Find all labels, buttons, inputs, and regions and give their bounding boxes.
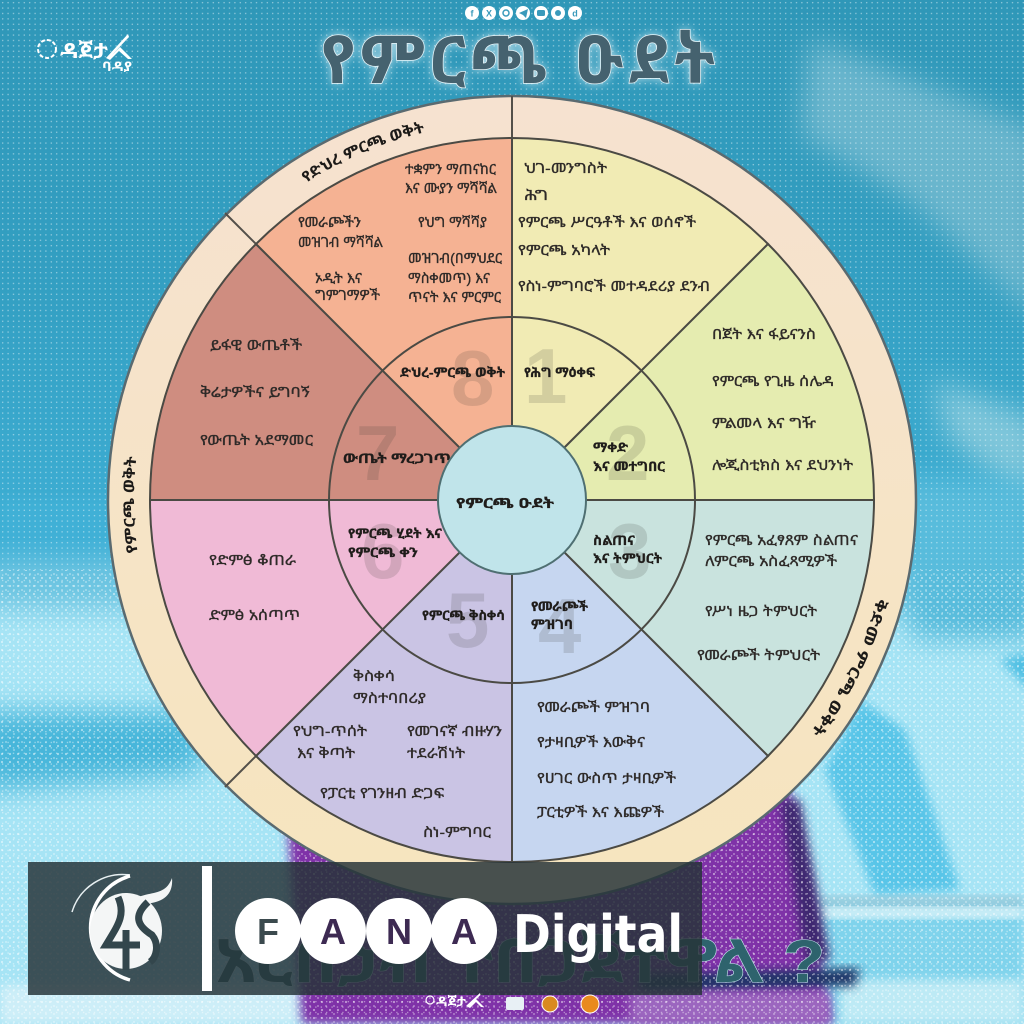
title: የምርጫ ዑደት	[321, 23, 715, 97]
segment 2 text: planning and implementation: የምርጫ የጊዜ ሰሌዳ	[712, 373, 834, 389]
segment 2 text: planning and implementation: በጀት እና ፋይናንስ	[712, 326, 816, 342]
segment 1 text: legal framework: ህገ-መንግስት	[524, 160, 608, 176]
segment 5 text: election campaign: ማስተባበሪያ	[353, 690, 426, 706]
segment 8 text: post-election period: የህግ ማሻሻያ	[418, 214, 487, 230]
segment 5 text: election campaign: የህግ-ጥሰት	[293, 723, 368, 739]
segment 4 text: voter registration: ፓርቲዎች እና እጩዎች	[537, 804, 665, 820]
segment 3 text: training and education: እና ትምህርት	[593, 551, 662, 566]
segment 1 text: legal framework: የምርጫ አካላት	[518, 242, 611, 258]
segment 3 text: training and education: ለምርጫ አስፈጻሚዎች	[705, 553, 838, 569]
title: የምርጫ ዑደት	[321, 23, 715, 97]
segment 8 text: post-election period: መዝገብ ማሻሻል	[298, 234, 384, 250]
ring dividers	[225, 96, 512, 787]
segment 8 text: post-election period: ኦዲት እና	[315, 270, 362, 286]
segment 3 text: training and education: የመራጮች ትምህርት	[697, 647, 821, 663]
icons: social media row: f	[470, 8, 474, 18]
segment wedges	[150, 138, 874, 862]
hub: election cycle: የምርጫ ዑደት	[456, 495, 555, 511]
segment 1 text: legal framework: የሕግ ማዕቀፍ	[524, 365, 595, 380]
segment 2 text: planning and implementation: ማቀድ	[593, 440, 628, 455]
segment 5 text: election campaign: ተደራሽነት	[407, 745, 466, 761]
segment 2 text: planning and implementation: ምልመላ እና ግዥ	[712, 415, 816, 431]
segment 5 text: election campaign: እና ቅጣት	[297, 745, 356, 761]
logo: top left	[38, 34, 132, 74]
segment 5 text: election campaign: ቅስቀሳ	[353, 668, 395, 684]
segment numbers: 1	[524, 332, 567, 420]
divider	[202, 866, 212, 991]
segment 2 text: planning and implementation: እና መተግበር	[593, 459, 666, 474]
segment 4 text: voter registration: የታዛቢዎች እውቅና	[537, 734, 645, 750]
segment 8 text: post-election period: እና ሙያን ማሻሻል	[405, 180, 498, 196]
segment 6 text: election process and day: የምርጫ ቀን	[348, 545, 418, 560]
wordmark: Digital: Digital	[513, 905, 683, 965]
segment 1 text: legal framework	[518, 160, 710, 380]
segment 4 text: voter registration: ምዝገባ	[531, 617, 573, 632]
segment 7 text: result verification: ይፋዊ ውጤቶች	[210, 337, 303, 353]
segment 7 text: result verification	[200, 337, 451, 466]
segment 8 text: post-election period: ተቋምን ማጠናከር	[405, 161, 496, 177]
segment numbers: 7	[356, 409, 399, 497]
outer ring	[108, 96, 916, 904]
wordmark: FANA circles: A	[320, 911, 346, 952]
ring label: election period: የምርጫ ወቅት	[122, 456, 138, 553]
segment numbers: 5	[446, 576, 489, 664]
footer logos: ዳጀታ	[436, 994, 467, 1009]
logo: top left: ባዳያ	[102, 59, 132, 74]
footer logos	[426, 993, 599, 1013]
segment 7 text: result verification: ቅሬታዎችና ይግባኝ	[200, 384, 310, 400]
segment 4 text: voter registration: የመራጮች ምዝገባ	[537, 699, 650, 715]
segment 3 text: training and education: ስልጠና	[593, 533, 636, 548]
cycle wheel	[106, 94, 918, 905]
segment 8 text: post-election period	[298, 161, 505, 380]
segment 4 text: voter registration: የሀገር ውስጥ ታዛቢዎች	[537, 770, 677, 786]
icons: social media row	[465, 6, 582, 20]
segment 5 text: election campaign: የምርጫ ቅስቀሳ	[422, 608, 505, 623]
icon: orange emblem 2	[581, 995, 599, 1013]
banner: FANA Digital	[28, 862, 702, 995]
segment 5 text: election campaign: የፓርቲ የገንዘብ ድጋፍ	[320, 785, 444, 801]
segment 6 text: election process and day: የድምፅ ቆጠራ	[209, 552, 297, 568]
segment 8 text: post-election period: ድህረ-ምርጫ ወቅት	[400, 365, 505, 380]
icon: orange emblem 1	[542, 996, 558, 1012]
segment numbers: 6	[361, 507, 404, 595]
wordmark: FANA circles: N	[386, 911, 412, 952]
segment 1 text: legal framework: የምርጫ ሥርዓቶች እና ወሰኖች	[518, 214, 697, 230]
ring label: pre-election period: ቅድመ ምርጫ ወቅት	[814, 600, 889, 735]
segment 7 text: result verification: የውጤት አደማመር	[200, 432, 313, 448]
segment 8 text: post-election period: ጥናት እና ምርምር	[408, 289, 501, 305]
segment 6 text: election process and day: ድምፅ አሰጣጥ	[209, 607, 300, 623]
segment numbers: 8	[451, 334, 494, 422]
wordmark: FANA circles: A	[451, 911, 477, 952]
ring label: post-election period: የድህረ ምርጫ ወቅት	[302, 122, 424, 182]
segment 1 text: legal framework: የስነ-ምግባሮች መተዳደሪያ ደንብ	[518, 278, 710, 294]
segment 5 text: election campaign: የመገናኛ ብዙሃን	[407, 723, 502, 739]
icons: social media row: X	[486, 8, 492, 18]
segment 8 text: post-election period: የመራጮችን	[298, 214, 361, 230]
wordmark: FANA circles: F	[257, 911, 279, 952]
segment 3 text: training and education: የምርጫ አፈፃጸም ስልጠና	[705, 532, 858, 548]
segment 5 text: election campaign: ስነ-ምግባር	[423, 824, 491, 840]
hub: election cycle	[438, 426, 586, 574]
logo: top left: ዳጀታ	[60, 40, 109, 63]
segment 6 text: election process and day	[209, 526, 443, 623]
segment 3 text: training and education: የሥነ ዜጋ ትምህርት	[705, 603, 818, 619]
segment 2 text: planning and implementation	[593, 326, 854, 474]
segment numbers: 2	[606, 409, 649, 497]
segment 4 text: voter registration: የመራጮች	[531, 599, 588, 614]
segment 5 text: election campaign	[293, 608, 505, 840]
logo: Fana emblem	[72, 874, 172, 980]
segment 7 text: result verification: ውጤት ማረጋገጥ	[343, 451, 451, 466]
segment numbers	[356, 332, 651, 670]
segment 6 text: election process and day: የምርጫ ሂደት እና	[348, 526, 443, 541]
middle ring circle	[329, 317, 695, 683]
icon: radio	[506, 997, 524, 1010]
wordmark: FANA circles	[235, 898, 497, 964]
segment numbers: 3	[608, 507, 651, 595]
question text behind banner: አርበኃብ ተበጋጀተዋል ?	[215, 928, 825, 995]
icons: social media row: d	[572, 8, 578, 18]
segment numbers: 4	[538, 582, 581, 670]
segment 3 text: training and education	[593, 532, 858, 663]
segment 8 text: post-election period: ግምገማዎች	[315, 287, 381, 303]
segment 8 text: post-election period: መዝገብ(በማህደር	[408, 250, 502, 266]
segment 8 text: post-election period: ማስቀመጥ) እና	[408, 270, 490, 286]
segment 2 text: planning and implementation: ሎጂስቲክስ እና ደህንነት	[712, 457, 854, 473]
segment 4 text: voter registration	[531, 599, 677, 820]
segment 1 text: legal framework: ሕግ	[524, 187, 548, 203]
